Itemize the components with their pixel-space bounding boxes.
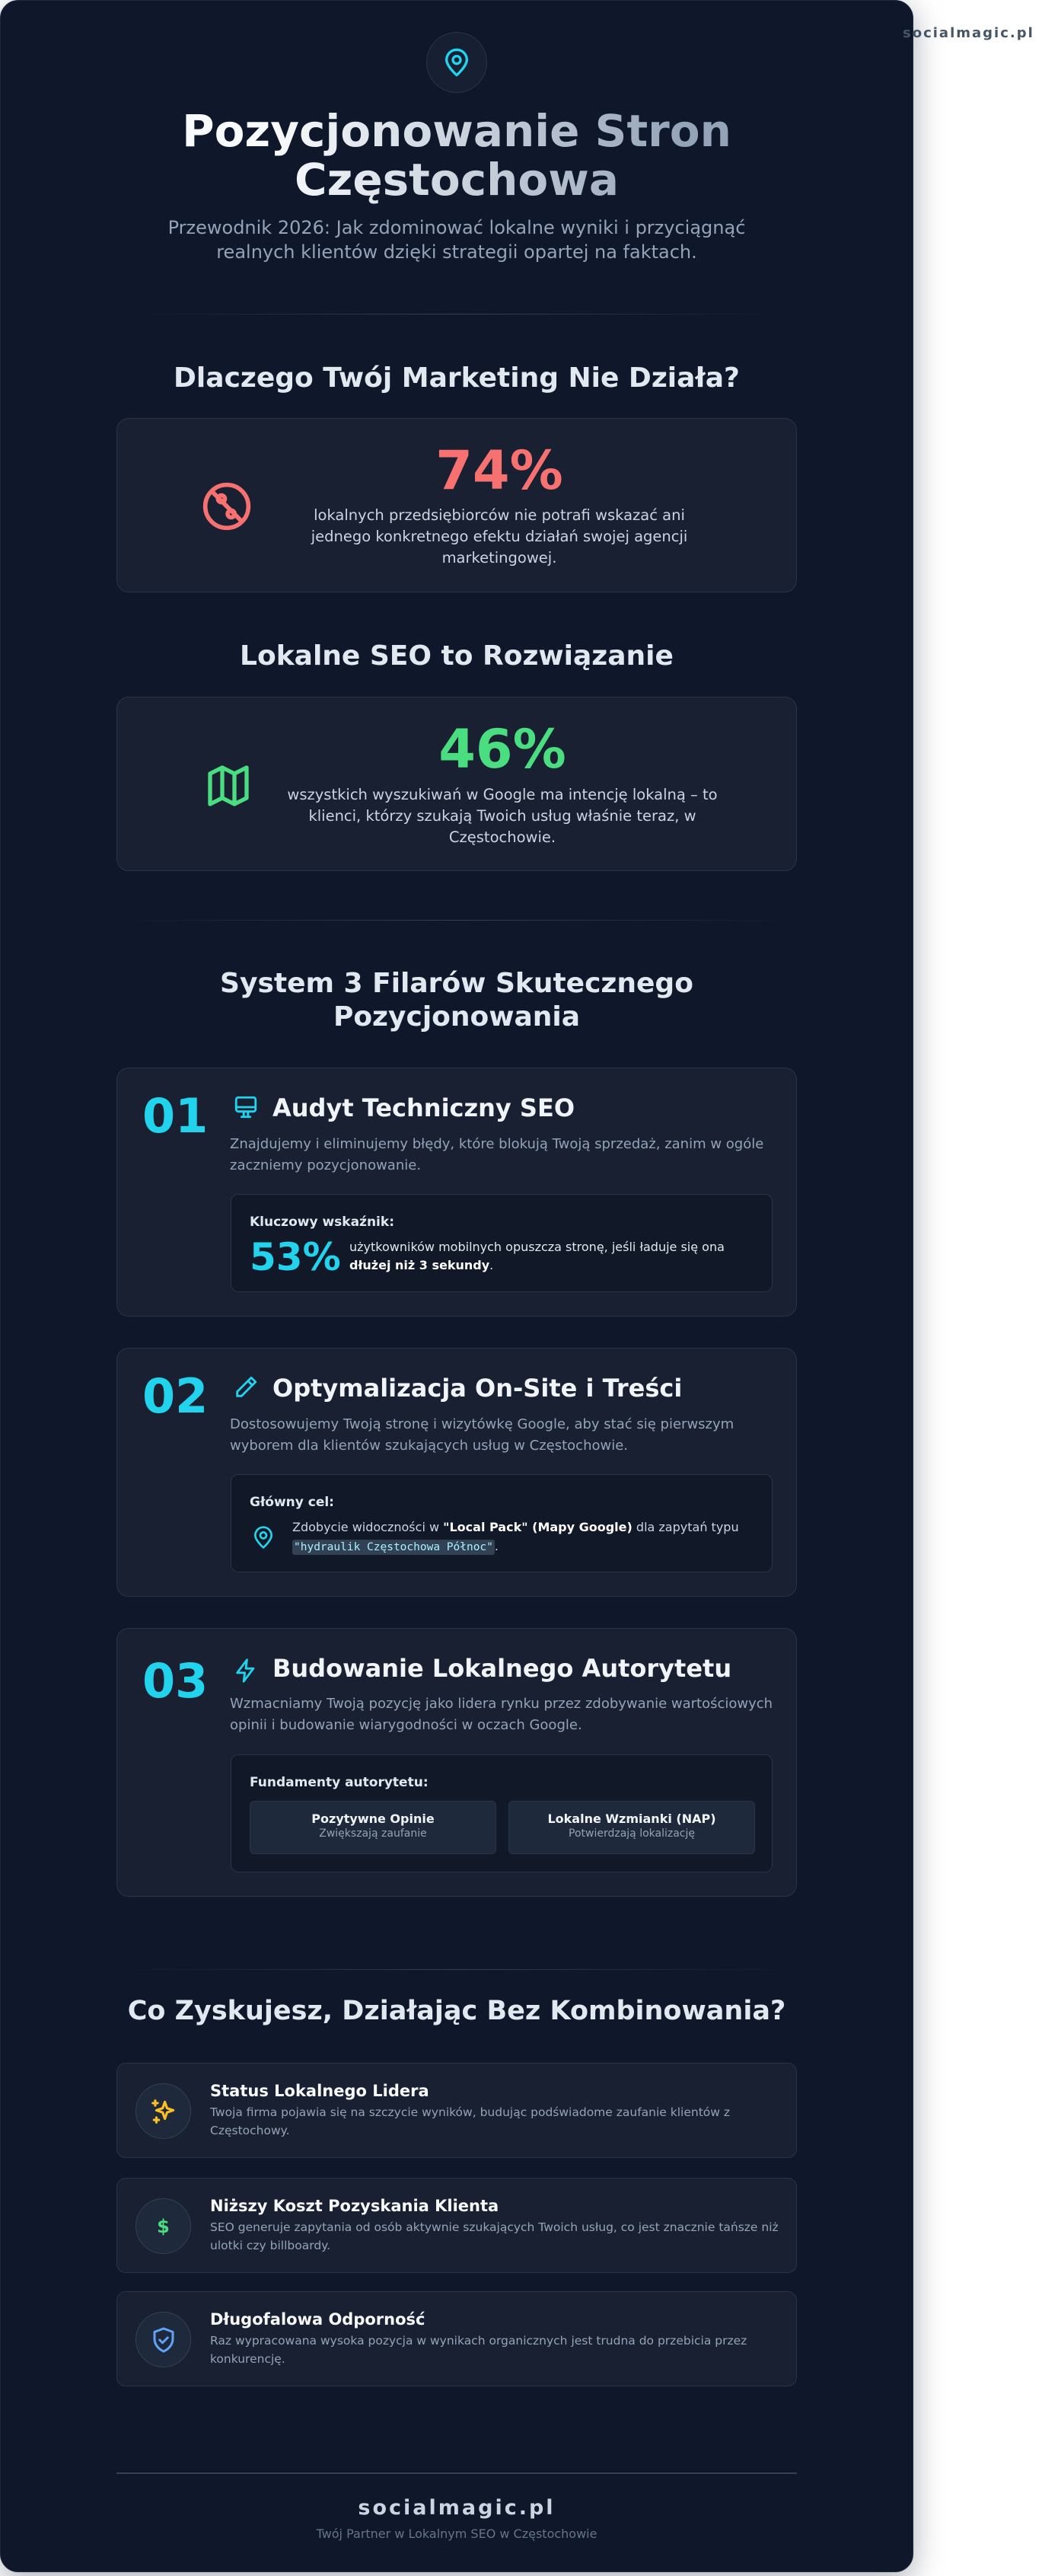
- title: Częstochowa: [295, 154, 619, 206]
- panel: pillar 03: Wzmacniamy Twoją pozycję jako lidera rynku przez zdobywanie wartościowych opinii i budowanie wiarygodności w oczach Google.: [230, 1696, 773, 1733]
- top-right brand: socialmagic.pl: [903, 25, 1034, 41]
- callout: key metric: użytkowników mobilnych opuszcza stronę, jeśli ładuje się ona dłużej niż 3 sekundy.: [349, 1240, 725, 1272]
- icon: location pin header: [426, 32, 487, 93]
- benefit: lower cost: SEO generuje zapytania od osób aktywnie szukających Twoich usług, co jest znacznie tańsze niż ulotki czy billboardy.: [210, 2220, 779, 2252]
- benefit: lower cost: [116, 2178, 797, 2273]
- heading: 3 pillars: Pozycjonowania: [333, 1001, 580, 1033]
- panel: pillar 02: [116, 1348, 797, 1597]
- heading: 3 pillars: [220, 968, 693, 1033]
- panel: pillar 03: Budowanie Lokalnego Autorytetu: [272, 1654, 731, 1683]
- panel: pillar 01: Audyt Techniczny SEO: [272, 1093, 575, 1122]
- callout: main goal: [231, 1474, 773, 1572]
- callout: authority foundations: [231, 1754, 773, 1872]
- heading: local SEO: Lokalne SEO to Rozwiązanie: [240, 640, 674, 672]
- panel: pillar 01: [116, 1068, 797, 1317]
- icon: pencil: [236, 1377, 257, 1397]
- footer brand: socialmagic.pl: [358, 2496, 556, 2520]
- callout: key metric: 53%: [250, 1235, 341, 1279]
- panel: pillar 02: Optymalizacja On-Site i Treści: [272, 1374, 682, 1403]
- sub-box: reviews: [250, 1801, 496, 1854]
- panel: pillar 03: 03: [142, 1653, 208, 1709]
- benefit: lower cost: Niższy Koszt Pozyskania Klienta: [210, 2197, 499, 2215]
- stat text: lokalnych przedsiębiorców nie potrafi wskazać ani jednego konkretnego efektu działań swojej agencji marketingowej.: [311, 506, 687, 567]
- sub-box: NAP: Lokalne Wzmianki (NAP): [547, 1811, 716, 1826]
- icon: monitor: [234, 1096, 257, 1118]
- stat 74%: 74%: [435, 439, 563, 502]
- icon: crossed out: [202, 483, 251, 530]
- sub-box: reviews: Zwiększają zaufanie: [319, 1827, 427, 1840]
- stat text: wszystkich wyszukiwań w Google ma intencję lokalną – to klienci, którzy szukają Twoich usług właśnie teraz, w Częstochowie.: [287, 786, 718, 846]
- sub-box: NAP: Potwierdzają lokalizację: [569, 1827, 695, 1840]
- title: Pozycjonowanie Stron: [182, 105, 731, 157]
- callout: main goal: Główny cel:: [250, 1495, 334, 1510]
- benefit: lower cost: $: [157, 2216, 170, 2237]
- sub-box: NAP: [508, 1801, 755, 1854]
- benefit: local leader: [116, 2063, 797, 2158]
- icon: lightning: [236, 1658, 254, 1683]
- callout: key metric: Kluczowy wskaźnik:: [250, 1215, 394, 1230]
- panel: pillar 02: 02: [142, 1368, 208, 1424]
- heading: why marketing fails: Dlaczego Twój Marketing Nie Działa?: [174, 362, 740, 394]
- panel: pillar 01: Znajdujemy i eliminujemy błędy, które blokują Twoją sprzedaż, zanim w ogóle zaczniemy pozycjonowanie.: [230, 1136, 763, 1173]
- icon: pin: [254, 1526, 272, 1549]
- stat 46%: 46%: [438, 718, 566, 780]
- callout: authority foundations: Fundamenty autorytetu:: [250, 1775, 429, 1790]
- heading: 3 pillars: System 3 Filarów Skutecznego: [220, 968, 693, 999]
- benefit: local leader: Twoja firma pojawia się na szczycie wyników, budując podświadome zaufanie klientów z Częstochowy.: [210, 2105, 730, 2137]
- footer tagline: Twój Partner w Lokalnym SEO w Częstochowie: [317, 2527, 597, 2541]
- subtitle: Przewodnik 2026: Jak zdominować lokalne wyniki i przyciągnąć realnych klientów dzięki strategii opartej na faktach.: [168, 217, 745, 263]
- heading: benefits: Co Zyskujesz, Działając Bez Kombinowania?: [128, 1996, 785, 2026]
- benefit: local leader: Status Lokalnego Lidera: [210, 2082, 429, 2100]
- panel: 74% stat: [116, 418, 797, 592]
- sub-box: reviews: Pozytywne Opinie: [311, 1811, 435, 1826]
- callout: main goal: Zdobycie widoczności w "Local Pack" (Mapy Google) dla zapytań typu "hydraulik Częstochowa Północ".: [292, 1520, 739, 1553]
- benefit: resilience: [116, 2291, 797, 2386]
- callout: key metric: [231, 1194, 773, 1292]
- panel: pillar 03: [116, 1628, 797, 1897]
- benefit: resilience: Raz wypracowana wysoka pozycja w wynikach organicznych jest trudna do przebicia przez konkurencję.: [210, 2334, 747, 2366]
- icon: map: [208, 765, 249, 806]
- benefit: resilience: Długofalowa Odporność: [210, 2310, 425, 2329]
- panel: pillar 01: 01: [142, 1088, 208, 1144]
- title: [0, 107, 913, 204]
- panel: pillar 02: Dostosowujemy Twoją stronę i wizytówkę Google, aby stać się pierwszym wyborem dla klientów szukających usług w Częstochowie.: [230, 1416, 734, 1454]
- panel: 46% stat: [116, 697, 797, 871]
